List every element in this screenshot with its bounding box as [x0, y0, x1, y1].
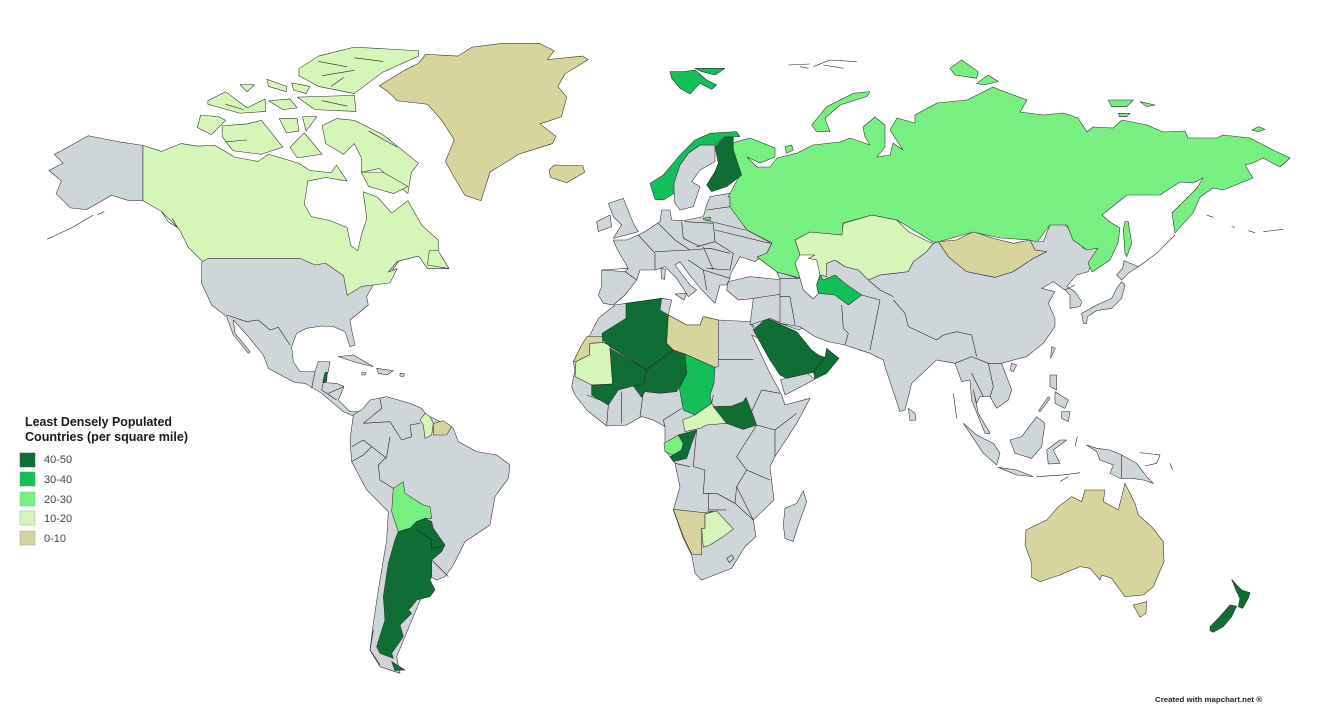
country borders: Africa	[587, 359, 797, 520]
legend item: 20-30: 20-30	[44, 494, 72, 506]
island chain: Kuril and Aleutian	[1138, 215, 1283, 267]
country: Iceland	[549, 165, 585, 183]
country: Guyana	[420, 413, 433, 438]
country: Argentina and Paraguay	[377, 518, 445, 658]
legend item: 40-50	[20, 453, 72, 467]
island: Franz Josef Land	[788, 60, 857, 68]
legend item: 40-50: 40-50	[44, 454, 72, 466]
region: Asia	[780, 215, 1098, 433]
island: Severnaya Zemlya	[950, 60, 978, 78]
country: Svalbard	[670, 70, 717, 94]
legend item: 0-10: 0-10	[44, 533, 66, 545]
country: Tierra del Fuego	[392, 662, 405, 671]
credit: Created with mapchart.net ®	[1155, 695, 1262, 704]
land: Turkey	[727, 277, 788, 300]
region: North America	[47, 44, 588, 416]
land: Iberia	[598, 270, 637, 305]
island: Bolshevik	[977, 75, 998, 85]
land: Asia mainland	[780, 223, 1098, 433]
country: Finland	[707, 137, 742, 192]
country: Australia	[1025, 483, 1164, 597]
country: Alaska	[47, 136, 143, 239]
country: United States, Mexico, Central America	[202, 245, 405, 416]
country: Niger	[633, 350, 687, 397]
legend title: Least Densely Populated	[25, 415, 172, 429]
land: Hainan	[1010, 363, 1017, 372]
country: Russia	[728, 87, 1290, 278]
country: Canada	[143, 47, 449, 295]
country: Madagascar	[783, 491, 807, 542]
region: Europe	[597, 193, 798, 325]
land: Mindanao	[1062, 412, 1070, 422]
country: South Sudan	[713, 397, 757, 429]
country: Central African Republic	[683, 403, 727, 432]
country: Lesotho	[727, 555, 734, 563]
land: Sumatra	[963, 423, 1000, 465]
region: Arabian Peninsula	[750, 300, 807, 330]
region: Russian Far East islands	[1108, 100, 1283, 280]
land: Borneo	[1010, 417, 1045, 458]
border: Paraguay	[417, 530, 442, 548]
land: Japan	[1082, 282, 1125, 323]
island: Lyakhovsky	[1118, 113, 1130, 117]
island: Novaya Zemlya	[812, 92, 870, 132]
country: Republic of the Congo	[670, 430, 697, 462]
legend item: 30-40	[20, 472, 72, 486]
island: Kotelny	[1140, 102, 1155, 107]
country: Turkmenistan	[817, 275, 862, 305]
country: Greenland	[379, 44, 588, 201]
land: Caucasus	[777, 272, 798, 290]
legend	[20, 415, 188, 545]
land: Levant and Iraq	[750, 293, 787, 325]
island: Wrangel	[1252, 127, 1265, 132]
legend item: 10-20	[20, 511, 72, 525]
country: Gabon	[664, 435, 683, 455]
country: Mongolia	[938, 232, 1047, 277]
country: Kazakhstan	[795, 215, 933, 280]
land: Luzon	[1050, 375, 1057, 390]
border: Papua	[1121, 455, 1123, 478]
island: New Zealand South Island	[1210, 605, 1237, 632]
region: Oceania	[1025, 483, 1250, 632]
land: Java	[998, 467, 1033, 477]
island: New Zealand North Island	[1232, 579, 1250, 608]
land: Palawan	[1039, 397, 1050, 412]
island: Sakhalin	[1123, 222, 1132, 257]
country: Norway	[650, 132, 740, 200]
country: Oman	[813, 348, 839, 379]
land: Taiwan	[1051, 347, 1055, 358]
country: Libya	[667, 315, 718, 367]
region: South America	[350, 397, 510, 673]
land: Sri Lanka	[908, 408, 916, 421]
country: Kaliningrad	[703, 217, 711, 220]
land: Lesser Sunda islands	[953, 393, 1173, 482]
country borders: Asia	[780, 280, 1075, 397]
region: Africa	[572, 298, 839, 580]
legend item: 30-40: 30-40	[44, 474, 72, 486]
continent base: South America	[350, 397, 510, 673]
island: New Siberian Islands	[1108, 100, 1133, 107]
country: Mauritania	[575, 343, 613, 385]
land: Sulawesi	[1047, 440, 1067, 464]
country borders: South America	[352, 398, 448, 665]
country: Bolivia	[392, 482, 432, 532]
country: Namibia	[673, 509, 713, 555]
legend title: Countries (per square mile)	[25, 430, 188, 444]
country: Sweden	[673, 145, 715, 210]
country: Saudi Arabia	[753, 318, 825, 378]
legend item: 0-10	[20, 531, 66, 545]
land: Great Britain	[608, 198, 638, 238]
land: Corsica and Sardinia	[661, 268, 665, 279]
island: Hokkaido	[1117, 261, 1138, 280]
country: Algeria	[602, 298, 673, 370]
land: Visayas	[1055, 392, 1068, 408]
legend item: 20-30	[20, 492, 72, 506]
country: Yemen	[781, 372, 815, 395]
country: Chad	[679, 354, 715, 415]
region: Southeast Asia islands	[953, 282, 1173, 483]
continent base: Africa	[572, 298, 810, 580]
region: Southern Africa	[673, 491, 807, 563]
land: New Guinea	[1087, 445, 1153, 483]
land: Sicily	[675, 293, 687, 300]
country: Mali	[592, 348, 647, 405]
land: Ireland	[597, 215, 612, 232]
island: Nordaustlandet	[695, 68, 725, 75]
country: Suriname and French Guiana	[433, 421, 452, 435]
country: Western Sahara	[573, 337, 603, 362]
island: Tasmania	[1133, 602, 1147, 617]
island: Kolguev	[785, 145, 793, 153]
region: Russian Arctic islands	[650, 60, 998, 210]
country: Botswana	[702, 511, 733, 547]
legend item: 10-20: 10-20	[44, 513, 72, 525]
country borders: Europe	[602, 207, 770, 290]
land: mainland Europe	[613, 193, 772, 303]
